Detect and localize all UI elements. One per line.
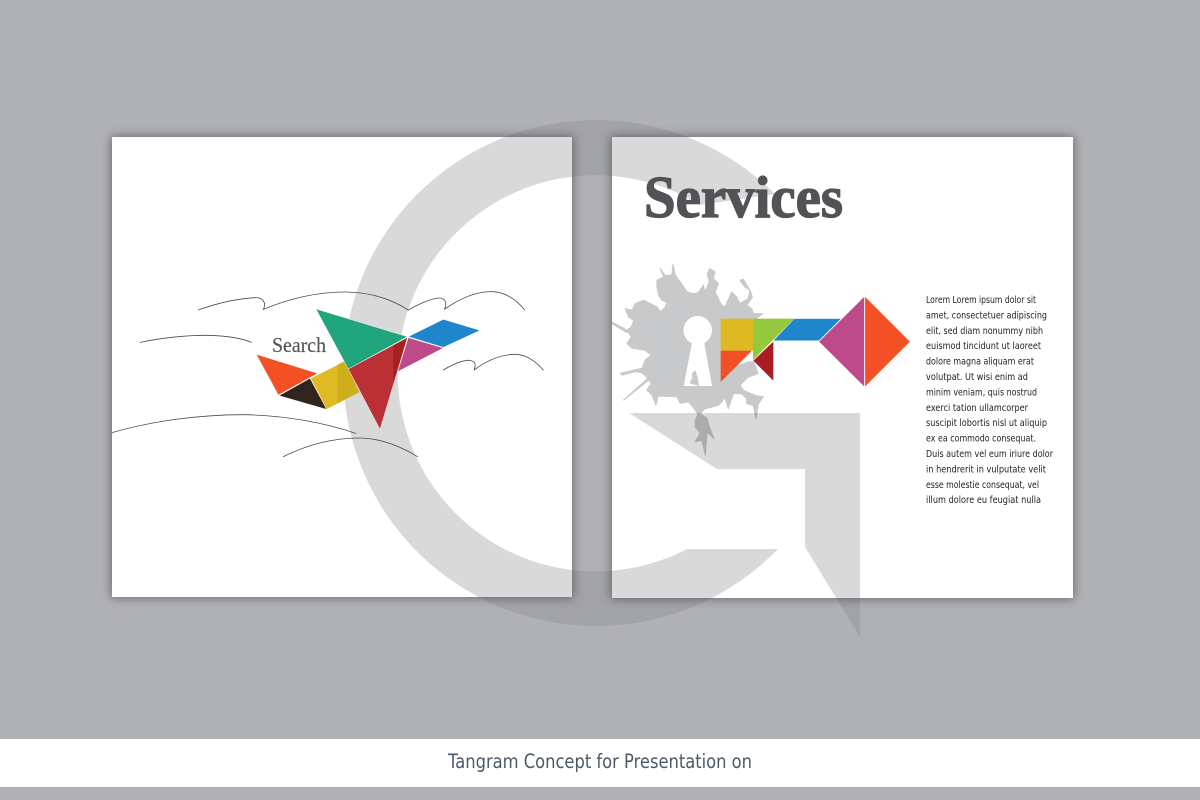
body text: amet, consectetuer adipiscing (926, 310, 1047, 321)
watermark: G logo on the search page (343, 120, 860, 637)
body text: in hendrerit in vulputate velit (926, 464, 1046, 475)
heading: Services: Services (644, 164, 843, 230)
splash with keyhole (612, 265, 763, 455)
body text: esse molestie consequat, vel (926, 480, 1039, 491)
body text: illum dolore eu feugiat nulla (926, 495, 1041, 506)
bird: green wing (316, 309, 407, 369)
tangram key (721, 297, 910, 387)
key: green triangle (753, 319, 794, 360)
caption band (0, 739, 1200, 787)
label: Search: Search (272, 333, 326, 357)
body text (926, 295, 1053, 506)
body text: Duis autem vel eum iriure dolor (926, 449, 1053, 460)
key: dark red triangle (753, 342, 773, 381)
bird: yellow square (311, 361, 359, 409)
panel: search page with tangram bird (112, 137, 572, 597)
body text: elit, sed diam nonummy nibh (926, 326, 1043, 337)
body text: exerci tation ullamcorper (926, 403, 1028, 414)
bird: orange tail (256, 354, 318, 395)
bird: blue head (408, 319, 480, 347)
body text: euismod tincidunt ut laoreet (926, 341, 1041, 352)
body text: Lorem Lorem ipsum dolor sit (926, 295, 1036, 306)
hand-drawn cloud lines (112, 292, 543, 457)
bird: magenta triangle (398, 338, 443, 372)
bird: red body (348, 338, 407, 429)
key: magenta half diamond (819, 297, 864, 387)
tangram bird (256, 309, 480, 429)
body text: volutpat. Ut wisi enim ad (926, 372, 1028, 383)
key: yellow square (721, 319, 753, 351)
key: blue shaft (773, 319, 841, 341)
body text: dolore magna aliquam erat (926, 357, 1034, 368)
body text: ex ea commodo consequat. (926, 434, 1036, 445)
bird: black triangle (279, 378, 327, 409)
body text: suscipit lobortis nisl ut aliquip (926, 418, 1047, 429)
body text: minim veniam, quis nostrud (926, 387, 1037, 398)
key: orange triangle (721, 351, 752, 382)
key: orange half diamond (865, 297, 910, 387)
caption text: Tangram Concept for Presentation on (447, 750, 752, 773)
panel: services page with tangram key (612, 137, 1073, 598)
watermark: G logo on the services page (343, 120, 860, 637)
